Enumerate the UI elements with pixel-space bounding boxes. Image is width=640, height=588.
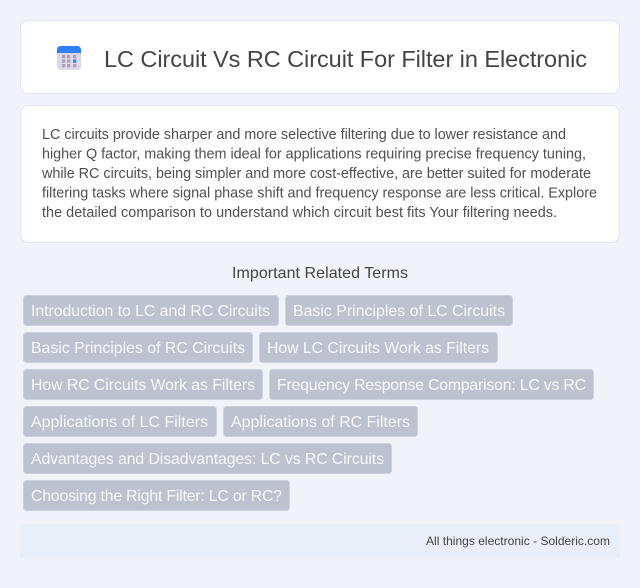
tag: advantages xyxy=(24,444,392,474)
tag: advantages: Advantages and Disadvantages: LC vs RC Circuits xyxy=(31,451,384,468)
text block: summary: filtering tasks where signal phase shift and frequency response are less critical. Explore xyxy=(42,186,597,202)
text block: summary xyxy=(41,127,597,221)
tag: RC applications xyxy=(224,406,418,436)
text block: summary: LC circuits provide sharper and more selective filtering due to lower resistance and xyxy=(42,127,566,143)
tag: RC principles xyxy=(24,332,252,362)
icon: calendar xyxy=(57,46,81,70)
tag: RC filters xyxy=(24,370,262,400)
tag: RC filters: How RC Circuits Work as Filters xyxy=(31,377,255,394)
panel: summary paragraph xyxy=(20,106,620,242)
tag: introduction: Introduction to LC and RC Circuits xyxy=(31,303,270,320)
tag: LC applications xyxy=(24,406,216,436)
footer: All things electronic - Solderic.com xyxy=(426,534,610,548)
heading: important related terms: Important Related Terms xyxy=(232,265,408,282)
tag: LC applications: Applications of LC Filters xyxy=(31,414,208,431)
tag: frequency response xyxy=(270,370,594,400)
tag: choosing xyxy=(24,480,290,510)
tag: introduction xyxy=(24,296,278,326)
tag: RC principles: Basic Principles of RC Circuits xyxy=(31,340,245,357)
text block: summary: while RC circuits, being simpler and more cost-effective, are better suited for moderate xyxy=(41,166,591,182)
tag: LC filters: How LC Circuits Work as Filters xyxy=(267,340,489,357)
footer xyxy=(20,524,620,558)
tag: RC applications: Applications of RC Filters xyxy=(231,414,410,431)
tag list xyxy=(24,296,594,510)
panel: title header xyxy=(20,20,620,94)
text block: summary: the detailed comparison to understand which circuit best fits Your filtering needs. xyxy=(42,205,557,221)
tag: choosing: Choosing the Right Filter: LC or RC? xyxy=(31,488,282,505)
title: LC Circuit Vs RC Circuit For Filter in Electronic xyxy=(104,46,587,72)
tag: LC filters xyxy=(260,332,498,362)
tag: LC principles xyxy=(286,296,512,326)
tag: LC principles: Basic Principles of LC Circuits xyxy=(293,303,505,320)
tag: frequency response: Frequency Response Comparison: LC vs RC xyxy=(277,377,586,394)
text block: summary: higher Q factor, making them ideal for applications requiring precise frequency tuning, xyxy=(42,146,586,162)
